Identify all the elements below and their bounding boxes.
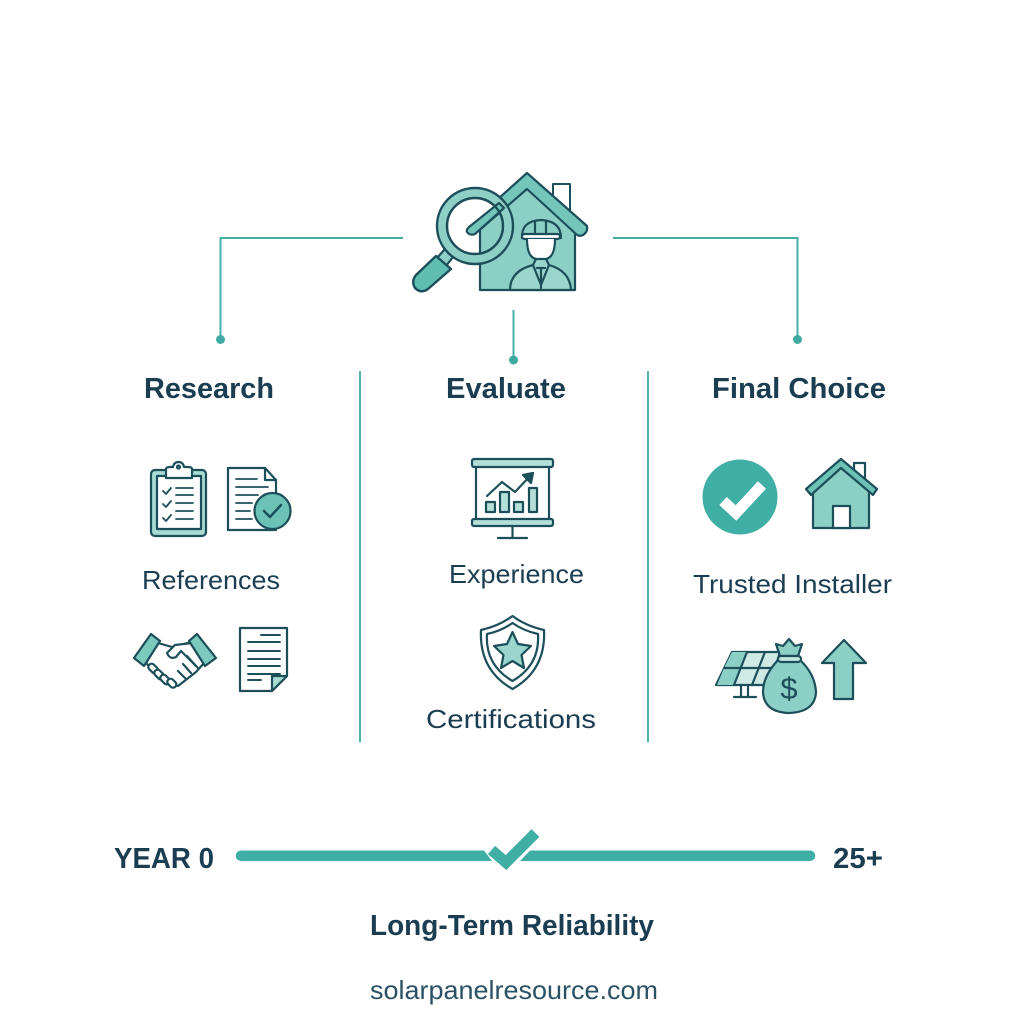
label: Trusted Installer: Trusted Installer xyxy=(693,569,892,599)
connector: to Research xyxy=(216,238,403,344)
source URL: solarpanelresource.com xyxy=(370,975,658,1005)
icon: house with magnifying glass and installer xyxy=(413,173,587,291)
icon: document xyxy=(240,628,287,691)
connector: to Final Choice xyxy=(613,238,802,344)
icon: up arrow xyxy=(822,640,866,699)
icon: shield with star xyxy=(481,616,544,689)
heading: Research: Research xyxy=(144,373,274,405)
divider: right xyxy=(647,371,649,742)
icon: solar panel with money bag: $ xyxy=(780,671,798,706)
connector: to Evaluate xyxy=(509,310,518,364)
icon: handshake xyxy=(134,634,216,689)
heading: Final Choice: Final Choice xyxy=(712,373,886,405)
label: References: References xyxy=(142,565,280,595)
label: Experience: Experience xyxy=(449,559,584,589)
icon: clipboard checklist xyxy=(151,462,206,536)
icon: presentation chart xyxy=(472,459,553,538)
icon: house xyxy=(806,459,877,528)
label: Long-Term Reliability: Long-Term Reliability xyxy=(370,910,654,942)
divider: left xyxy=(359,371,361,742)
icon: check circle xyxy=(702,460,778,534)
timeline bar with check xyxy=(236,833,815,862)
label: YEAR 0: YEAR 0 xyxy=(114,843,214,875)
heading: Evaluate: Evaluate xyxy=(446,373,566,405)
icon: solar panel with money bag xyxy=(716,639,816,713)
icon: document with check badge xyxy=(228,468,290,530)
label: 25+: 25+ xyxy=(833,843,883,875)
label: Certifications: Certifications xyxy=(426,704,596,734)
